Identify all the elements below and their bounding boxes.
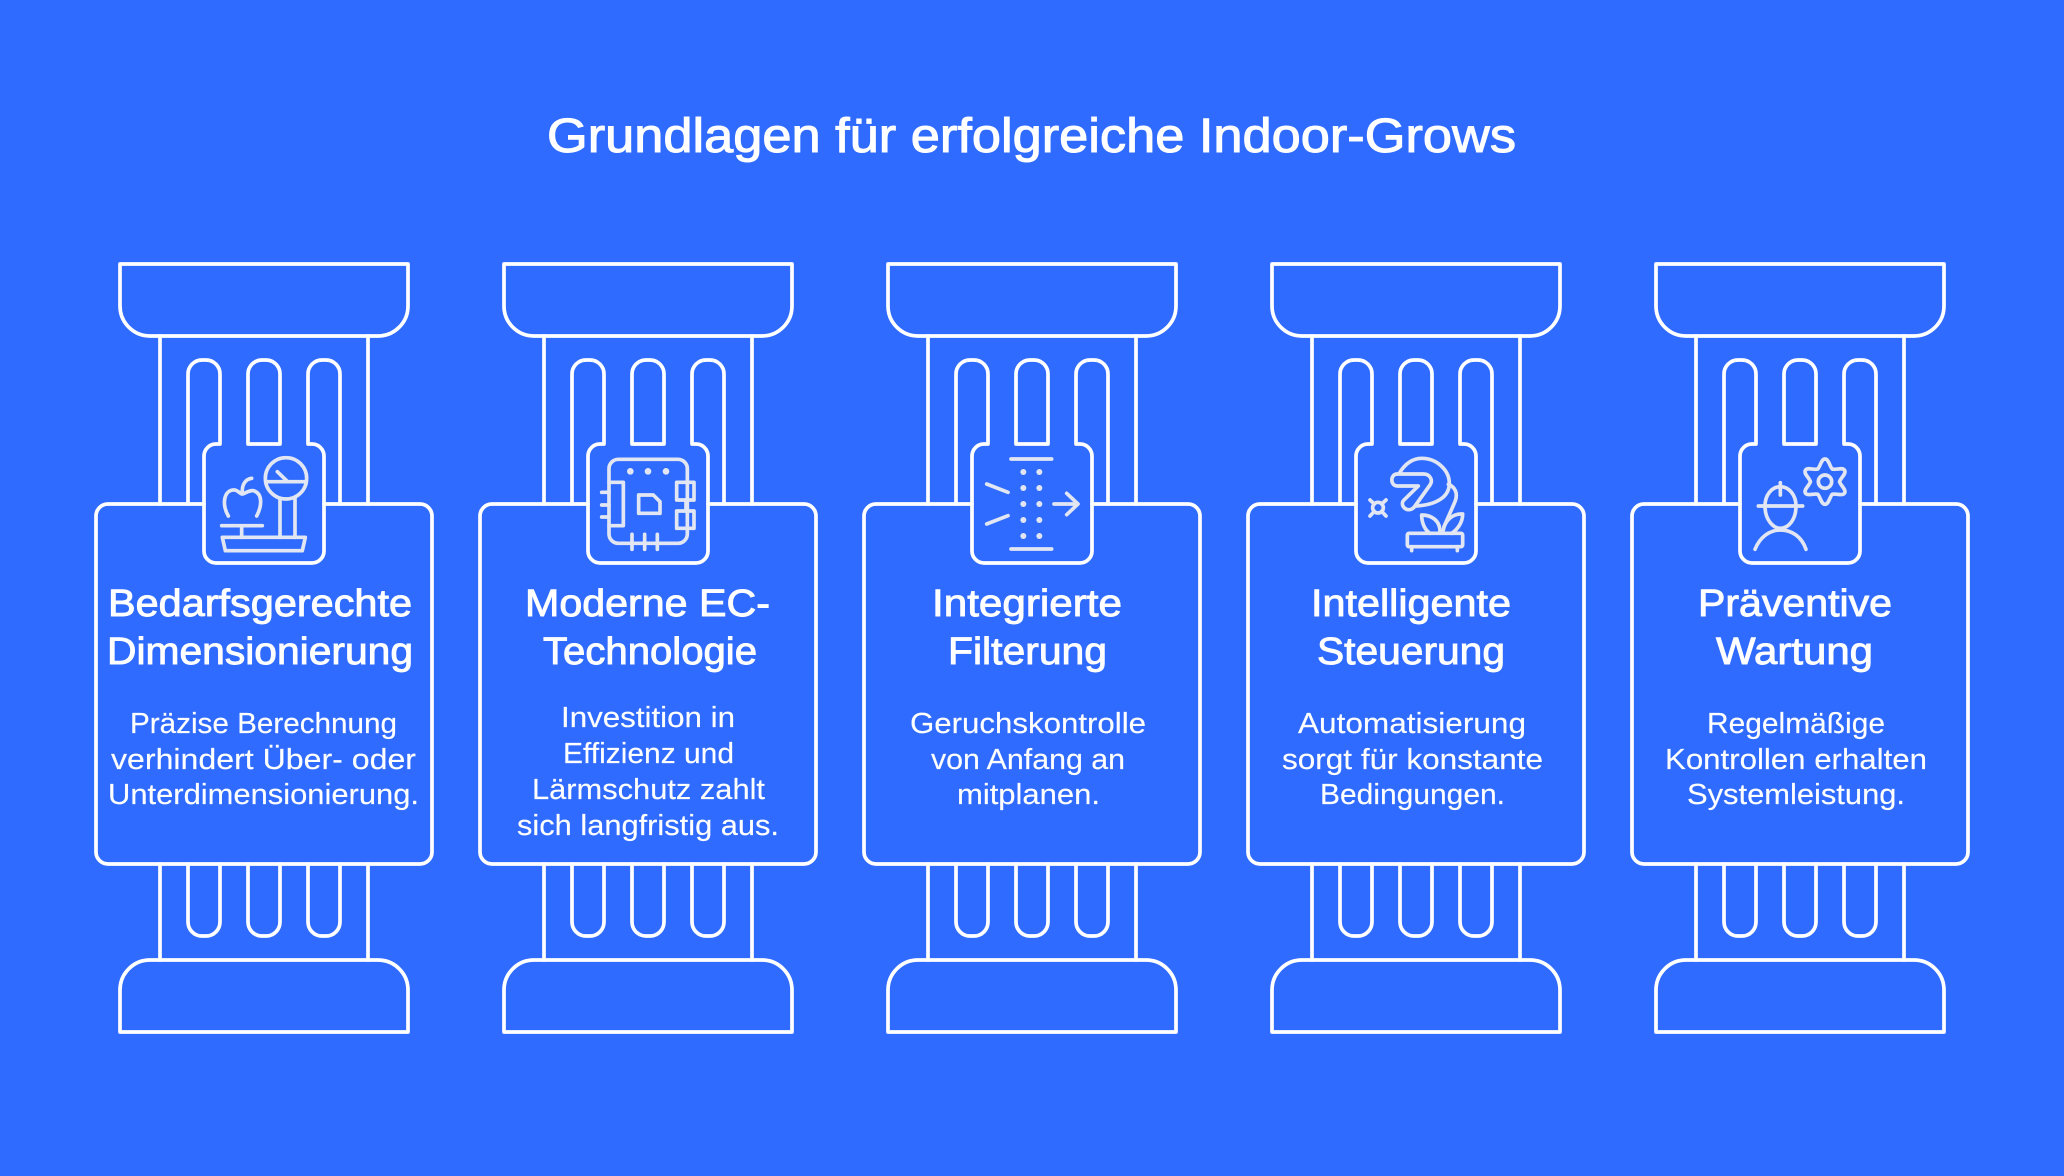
body text: mitplanen. — [957, 779, 1100, 811]
body text: Kontrollen erhalten — [1665, 744, 1927, 776]
body text: Investition in — [561, 702, 735, 734]
heading — [932, 583, 1122, 673]
body text: sich langfristig aus. — [517, 810, 779, 842]
heading — [1698, 583, 1892, 673]
body text — [1665, 708, 1927, 811]
body text: sorgt für konstante — [1282, 744, 1543, 776]
heading — [1311, 583, 1511, 673]
pillar outline 2 — [480, 264, 816, 1032]
body text: Automatisierung — [1298, 708, 1526, 740]
body text: Lärmschutz zahlt — [532, 774, 765, 806]
body text — [910, 708, 1146, 811]
heading: Präventive — [1698, 583, 1892, 625]
body text: Effizienz und — [563, 738, 734, 770]
heading: Integrierte — [932, 583, 1122, 625]
heading: Moderne EC- — [525, 583, 770, 625]
heading: Wartung — [1716, 631, 1873, 673]
panel: pillar 5 Präventive Wartung — [1632, 264, 1968, 1032]
pillar outline 1 — [96, 264, 432, 1032]
heading: Steuerung — [1317, 631, 1505, 673]
body text: verhindert Über- oder — [111, 744, 416, 776]
heading: Filterung — [948, 631, 1107, 673]
body text: von Anfang an — [931, 744, 1125, 776]
body text: Geruchskontrolle — [910, 708, 1146, 740]
body text: Unterdimensionierung. — [108, 779, 419, 811]
body text: Präzise Berechnung — [130, 708, 397, 740]
panel: pillar 2 Moderne EC-Technologie — [480, 264, 816, 1032]
icon: air filter — [987, 459, 1078, 549]
panel: pillar 4 Intelligente Steuerung — [1248, 264, 1584, 1032]
body text — [108, 708, 419, 811]
icon: smart plant lamp — [1370, 458, 1463, 551]
panel: pillar 1 Bedarfsgerechte Dimensionierung — [96, 264, 432, 1032]
body text: Regelmäßige — [1707, 708, 1885, 740]
heading: Dimensionierung — [107, 631, 413, 673]
body text: Bedingungen. — [1320, 779, 1505, 811]
body text — [517, 702, 779, 842]
icon: technician and gear — [1755, 459, 1848, 549]
heading: Technologie — [543, 631, 757, 673]
title: Grundlagen für erfolgreiche Indoor-Grows — [547, 110, 1516, 163]
icon: apple on scale — [222, 458, 307, 551]
pillar outline 5 — [1632, 264, 1968, 1032]
heading — [525, 583, 770, 673]
heading: Intelligente — [1311, 583, 1511, 625]
panel: pillar 3 Integrierte Filterung — [864, 264, 1200, 1032]
pillar outline 4 — [1248, 264, 1584, 1032]
icon: circuit board — [602, 459, 694, 549]
body text — [1282, 708, 1543, 811]
heading — [107, 583, 413, 673]
pillar outline 3 — [864, 264, 1200, 1032]
heading: Bedarfsgerechte — [108, 583, 412, 625]
body text: Systemleistung. — [1687, 779, 1905, 811]
